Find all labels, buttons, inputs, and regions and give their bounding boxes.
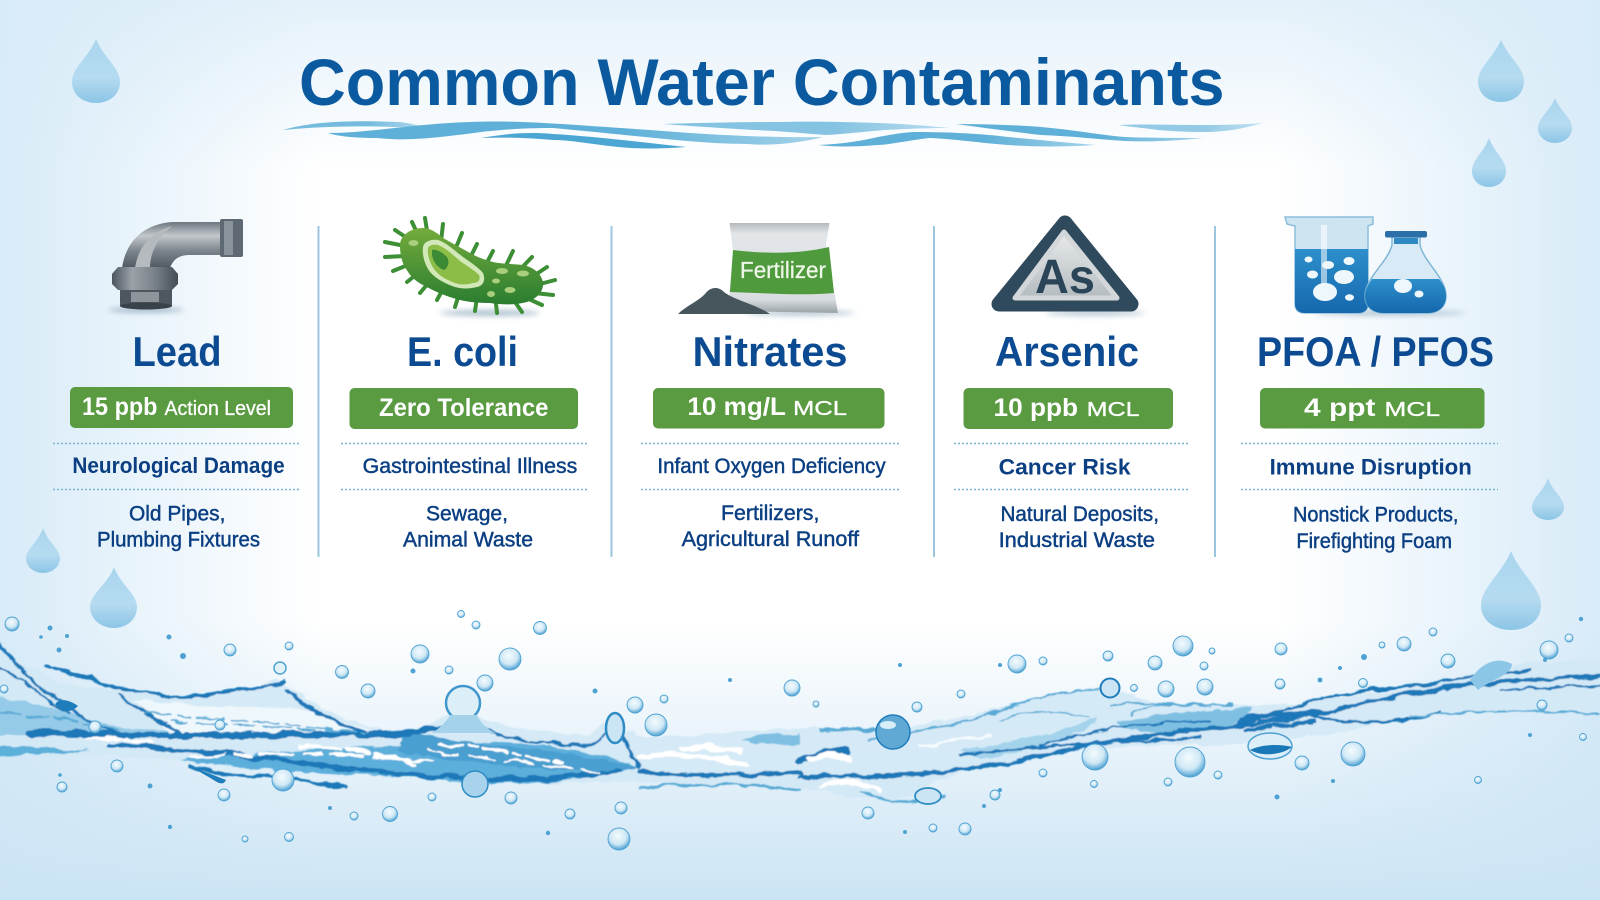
water splash band [0,610,1600,850]
sources [682,502,859,551]
heading: Arsenic: Arsenic [995,328,1139,375]
sources [97,503,260,552]
sources [1293,504,1458,553]
heading: Lead: Lead [132,328,222,375]
badge: 10 mg/L MCL [653,388,884,428]
badge: Zero Tolerance [350,388,578,429]
droplets below the surface [57,700,1586,850]
badge: 10 mg/L MCL: 10 mg/L [687,393,786,421]
sources: Plumbing Fixtures [97,529,260,552]
sources: Firefighting Foam [1296,530,1452,553]
badge: 4 ppt MCL: MCL [1384,399,1440,421]
sources: Animal Waste [403,529,533,552]
badge: 10 ppb MCL: MCL [1087,399,1140,421]
panel: pfoa / pfos [1241,217,1498,553]
health effect: Neurological Damage [72,453,285,478]
icon: fertilizer bag [678,223,855,315]
panel: e. coli [341,218,589,552]
health effect: Cancer Risk [999,454,1131,479]
sources: Nonstick Products, [1293,504,1458,527]
sources [999,503,1159,552]
icon: fertilizer bag: Fertilizer [740,257,826,283]
sources [403,503,533,552]
icon: bacterium [385,218,555,316]
icon: arsenic warning triangle: As [1035,251,1095,304]
badge: 15 ppb Action Level: 15 ppb [82,393,158,421]
sources: Industrial Waste [999,529,1155,552]
panel: nitrates [641,223,901,551]
sources: Old Pipes, [129,503,225,526]
badge: 4 ppt MCL: 4 ppt [1304,394,1376,422]
sources: Sewage, [426,503,508,526]
heading: PFOA / PFOS: PFOA / PFOS [1257,328,1494,375]
heading: E. coli: E. coli [407,328,518,375]
health effect: Immune Disruption [1270,454,1472,480]
badge: 10 ppb MCL: 10 ppb [994,394,1078,422]
badge: 4 ppt MCL [1260,388,1484,428]
icon: lab beaker and flask [1285,217,1465,315]
sources: Natural Deposits, [1000,503,1159,526]
badge: 15 ppb Action Level [70,387,293,428]
heading: Nitrates: Nitrates [692,328,848,375]
badge: 15 ppb Action Level: Action Level [164,398,271,420]
water drops [26,39,1572,630]
title wave ribbons [283,121,1262,148]
badge: 10 ppb MCL [964,388,1173,429]
badge: 10 mg/L MCL: MCL [793,398,847,420]
large crown bulbs [55,661,1512,804]
sources: Fertilizers, [721,502,819,525]
title: Common Water Contaminants [299,45,1224,119]
icon: arsenic warning triangle [999,223,1145,315]
health effect: Gastrointestinal Illness [363,455,577,478]
column dividers [318,226,1215,557]
icon: pipe elbow [108,219,243,312]
health effect: Infant Oxygen Deficiency [657,455,886,478]
sources: Agricultural Runoff [682,528,859,551]
splash droplets above the surface [0,610,1583,736]
panel: lead [53,219,299,552]
badge: Zero Tolerance: Zero Tolerance [379,394,548,422]
panel: arsenic [954,223,1188,552]
